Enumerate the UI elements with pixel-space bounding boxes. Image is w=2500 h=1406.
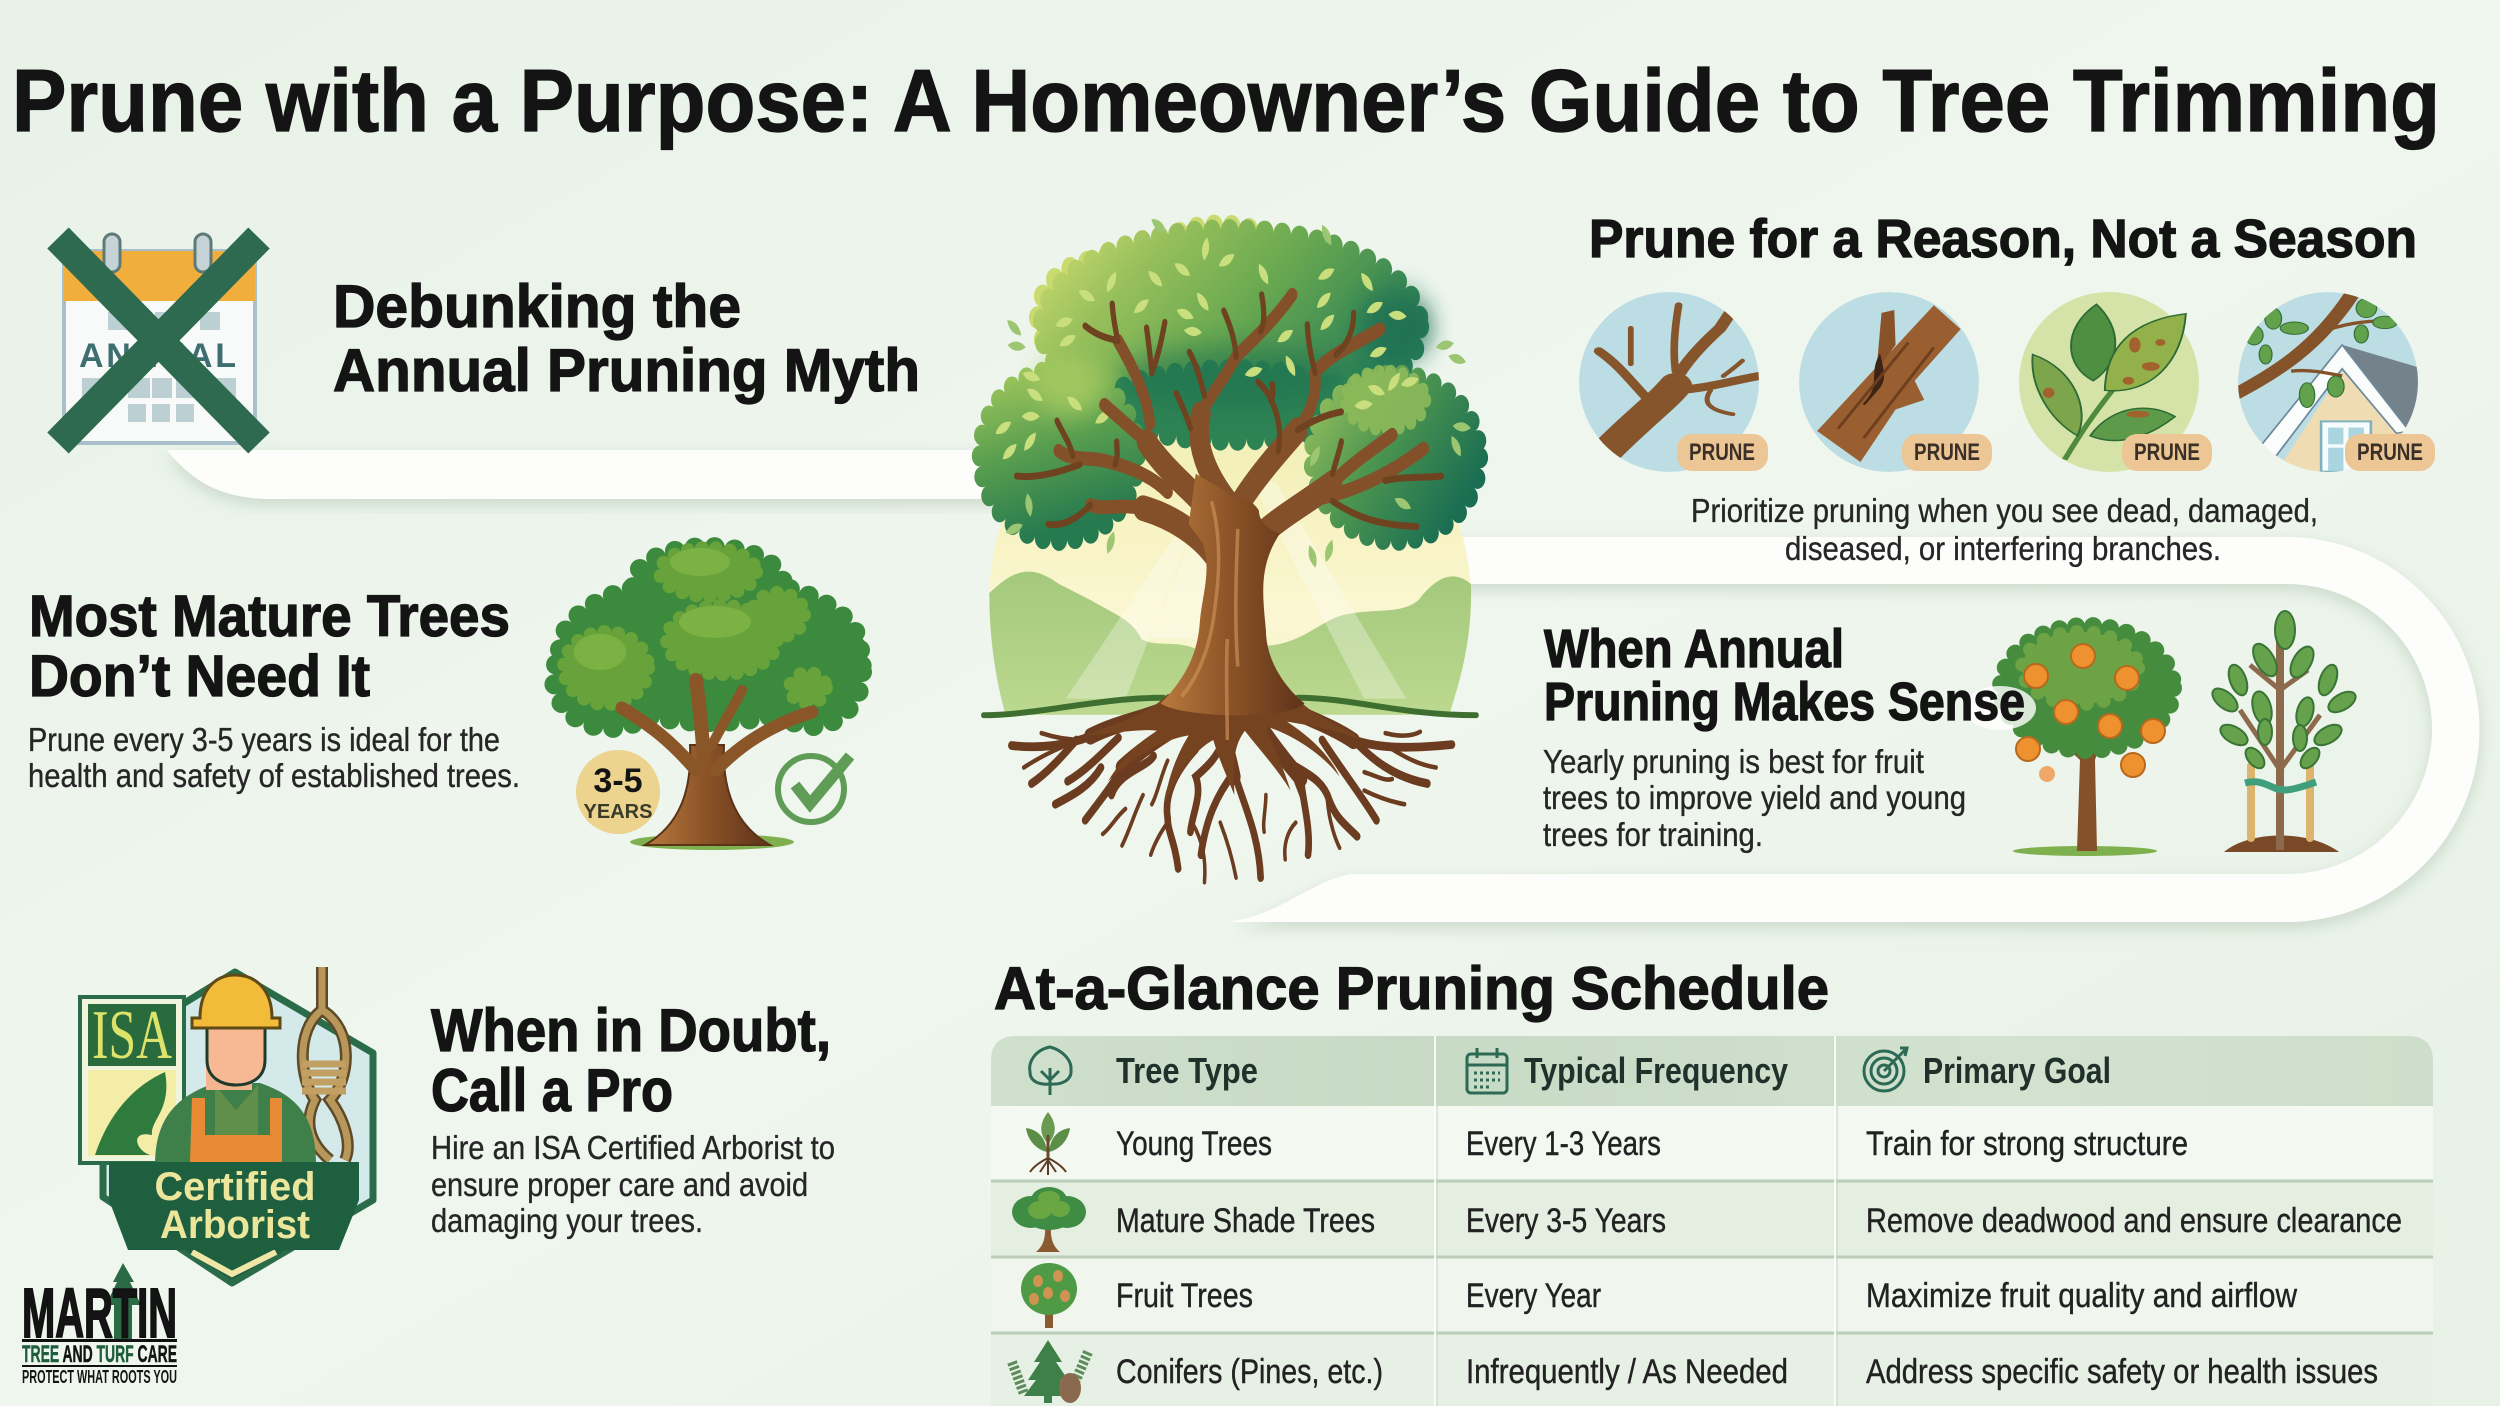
heading: most mature trees: Most Mature Trees xyxy=(29,584,510,649)
leaves xyxy=(994,236,1420,463)
icon: fruit tree small xyxy=(1021,1263,1077,1328)
label: prune pill 4: PRUNE xyxy=(2357,439,2423,466)
trunk and root flare xyxy=(1085,474,1364,804)
row: conifers: Address specific safety or health issues xyxy=(1866,1353,2378,1391)
reason: branch touching house xyxy=(2238,292,2418,472)
heading: when in doubt: Call a Pro xyxy=(431,1057,673,1124)
text: hire an arborist xyxy=(431,1129,835,1239)
text: prioritize pruning xyxy=(1691,492,2318,567)
row: conifers xyxy=(1012,1340,2378,1403)
text: mature tree body: Prune every 3-5 years is ideal for the xyxy=(28,721,500,758)
row: young trees xyxy=(1026,1112,2188,1175)
text: hire an arborist: ensure proper care and avoid xyxy=(431,1166,808,1203)
row: mature shade trees: Mature Shade Trees xyxy=(1116,1202,1375,1240)
canopy xyxy=(980,226,1480,540)
icon: target xyxy=(1864,1048,1907,1091)
row: young trees: Every 1-3 Years xyxy=(1466,1125,1661,1163)
table header xyxy=(991,1036,2433,1106)
heading: when in doubt: When in Doubt, xyxy=(431,997,831,1064)
text: mature tree body xyxy=(28,721,520,794)
heading: pruning schedule: At-a-Glance Pruning Schedule xyxy=(994,955,1829,1022)
ground line xyxy=(983,698,1476,715)
table header: Typical Frequency xyxy=(1524,1050,1788,1091)
label: prune pill 2: PRUNE xyxy=(1914,439,1980,466)
row: mature shade trees: Every 3-5 Years xyxy=(1466,1202,1666,1240)
ISA panel: ISA xyxy=(92,997,172,1074)
logo: Martin Tree and Turf Care: PROTECT WHAT ROOTS YOU xyxy=(22,1367,177,1387)
icon: mature tree: YEARS xyxy=(584,801,652,823)
icon: staked young tree xyxy=(2208,611,2359,852)
row: fruit trees: Every Year xyxy=(1466,1277,1601,1315)
text: yearly pruning body: Yearly pruning is best for fruit xyxy=(1543,743,1924,780)
label: prune pill 3 xyxy=(2122,434,2212,471)
text: prioritize pruning: diseased, or interfering branches. xyxy=(1785,530,2221,567)
label: prune pill 2 xyxy=(1902,434,1992,471)
icon: calendar xyxy=(1467,1048,1507,1093)
reason: diseased leaves xyxy=(2019,292,2199,472)
row: young trees: Train for strong structure xyxy=(1866,1125,2188,1163)
reason: damaged branch xyxy=(1799,292,1979,472)
roots xyxy=(1011,703,1452,882)
text: mature tree body: health and safety of established trees. xyxy=(28,757,520,794)
row: fruit trees: Maximize fruit quality and airflow xyxy=(1866,1277,2297,1315)
ISA panel xyxy=(80,997,184,1163)
reason: dead branch xyxy=(1579,292,1774,472)
heading: when in doubt xyxy=(431,997,831,1124)
table header: Tree Type xyxy=(1116,1050,1258,1091)
heading: when annual pruning makes sense: Pruning Makes Sense xyxy=(1544,672,2025,732)
icon: mature tree xyxy=(554,547,862,850)
icon: tree outline xyxy=(1030,1047,1071,1095)
banner: Certified xyxy=(154,1165,316,1209)
logo: Martin Tree and Turf Care xyxy=(22,1263,177,1387)
icon: fruit tree xyxy=(2001,626,2173,856)
icon: shade tree xyxy=(1012,1187,1086,1252)
text: yearly pruning body: trees to improve yield and young xyxy=(1543,779,1966,816)
table: pruning schedule xyxy=(991,1036,2433,1406)
heading: debunking the myth: Debunking the xyxy=(333,273,741,340)
text: yearly pruning body: trees for training. xyxy=(1543,816,1763,853)
icon: crossed-out annual calendar xyxy=(58,234,259,443)
illustration: central tree with roots xyxy=(980,215,1480,882)
branches xyxy=(1017,295,1441,566)
row: young trees: Young Trees xyxy=(1116,1125,1272,1163)
label: prune pill 3: PRUNE xyxy=(2134,439,2200,466)
heading: most mature trees xyxy=(29,584,510,709)
ribbon: right loop xyxy=(1228,537,2480,922)
text: yearly pruning body xyxy=(1543,743,1966,853)
heading: when annual pruning makes sense: When Annual xyxy=(1544,619,1844,679)
badge: ISA certified arborist xyxy=(80,967,373,1283)
row: mature shade trees: Remove deadwood and ensure clearance xyxy=(1866,1202,2402,1240)
text: hire an arborist: damaging your trees. xyxy=(431,1202,703,1239)
icon: conifer and pinecone xyxy=(1012,1340,1088,1403)
heading: debunking the myth xyxy=(333,273,920,404)
row: conifers: Infrequently / As Needed xyxy=(1466,1353,1788,1391)
row: fruit trees: Fruit Trees xyxy=(1116,1277,1253,1315)
banner: Arborist xyxy=(160,1203,310,1247)
heading: when annual pruning makes sense xyxy=(1544,619,2036,732)
label: prune pill 1 xyxy=(1677,434,1768,471)
arborist figure xyxy=(155,975,316,1165)
row: mature shade trees xyxy=(1012,1187,2402,1252)
icon: crossed-out annual calendar: ANNUAL xyxy=(79,337,236,375)
heading: most mature trees: Don’t Need It xyxy=(29,644,370,709)
heading: debunking the myth: Annual Pruning Myth xyxy=(333,337,920,404)
table header: Primary Goal xyxy=(1923,1050,2111,1091)
logo: Martin Tree and Turf Care: TREE AND TURF CARE xyxy=(22,1341,177,1368)
rope xyxy=(302,967,348,1160)
row: conifers: Conifers (Pines, etc.) xyxy=(1116,1353,1383,1391)
text: hire an arborist: Hire an ISA Certified Arborist to xyxy=(431,1129,835,1166)
logo: Martin Tree and Turf Care: MARTIN xyxy=(22,1274,177,1352)
icon: mature tree: 3-5 xyxy=(593,762,643,800)
label: prune pill 4 xyxy=(2345,434,2435,471)
banner xyxy=(109,1162,359,1250)
sunburst landscape circle xyxy=(989,433,1472,715)
text: prioritize pruning: Prioritize pruning when you see dead, damaged, xyxy=(1691,492,2318,529)
heading: prune for a reason: Prune for a Reason, Not a Season xyxy=(1589,209,2417,269)
row: fruit trees xyxy=(1021,1263,2297,1328)
row backgrounds xyxy=(991,1036,2433,1406)
label: prune pill 1: PRUNE xyxy=(1689,439,1755,466)
ribbon: top connector xyxy=(167,450,1000,499)
icon: sapling xyxy=(1026,1112,1070,1175)
icons: four pruning reasons xyxy=(1579,292,2435,476)
